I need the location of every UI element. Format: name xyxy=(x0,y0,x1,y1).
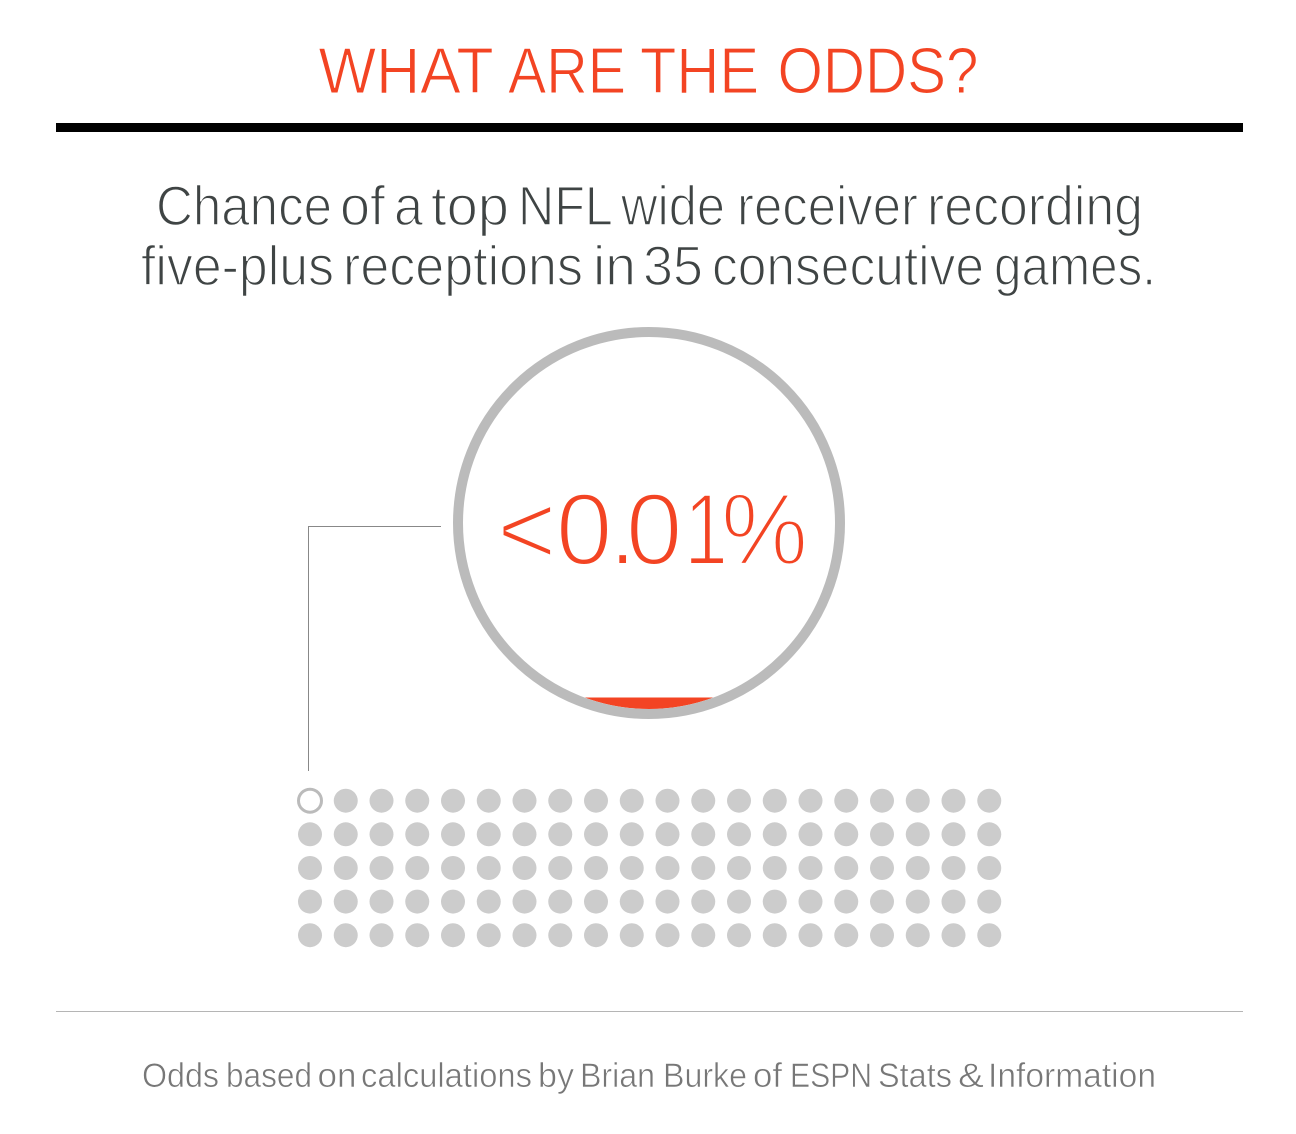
subtitle: NFL xyxy=(518,174,612,237)
source note: Burke xyxy=(663,1057,747,1095)
subtitle: Chance xyxy=(156,174,332,237)
percentage value: % xyxy=(721,472,808,586)
source note: Stats xyxy=(878,1057,952,1095)
subtitle: games. xyxy=(994,234,1156,297)
subtitle: in xyxy=(593,234,636,297)
subtitle: consecutive xyxy=(712,234,984,297)
heading rule xyxy=(56,123,1243,132)
source note: on xyxy=(318,1057,356,1095)
source note: calculations xyxy=(361,1057,532,1095)
dot grid of 100 xyxy=(298,789,1001,947)
source note: based xyxy=(226,1057,312,1095)
subtitle: a xyxy=(394,174,424,237)
source note: of xyxy=(753,1057,783,1095)
highlighted hollow dot xyxy=(298,789,322,812)
source note: & xyxy=(958,1057,984,1095)
subtitle: top xyxy=(431,174,509,237)
title: ODDS? xyxy=(778,34,978,107)
subtitle: receiver xyxy=(737,174,918,237)
subtitle: five-plus xyxy=(141,234,334,297)
subtitle: of xyxy=(340,174,385,237)
source note: by xyxy=(538,1057,574,1095)
subtitle xyxy=(141,174,1156,297)
title: THE xyxy=(640,34,759,107)
red filled segment xyxy=(585,698,713,709)
leader line xyxy=(308,526,441,771)
subtitle: receptions xyxy=(343,234,583,297)
magnified circle callout xyxy=(458,332,840,714)
subtitle: 35 xyxy=(643,234,703,297)
percentage value: <0.0 xyxy=(497,472,682,586)
title: ARE xyxy=(508,34,626,107)
circle outline xyxy=(458,332,840,714)
subtitle: wide xyxy=(620,174,725,237)
source note: Odds xyxy=(142,1057,219,1095)
percentage value: 1 xyxy=(684,472,728,586)
source note: ESPN xyxy=(790,1057,872,1095)
source note: Information xyxy=(988,1057,1156,1095)
source note: Brian xyxy=(580,1057,655,1095)
subtitle: recording xyxy=(927,174,1143,237)
title: WHAT xyxy=(318,34,493,107)
